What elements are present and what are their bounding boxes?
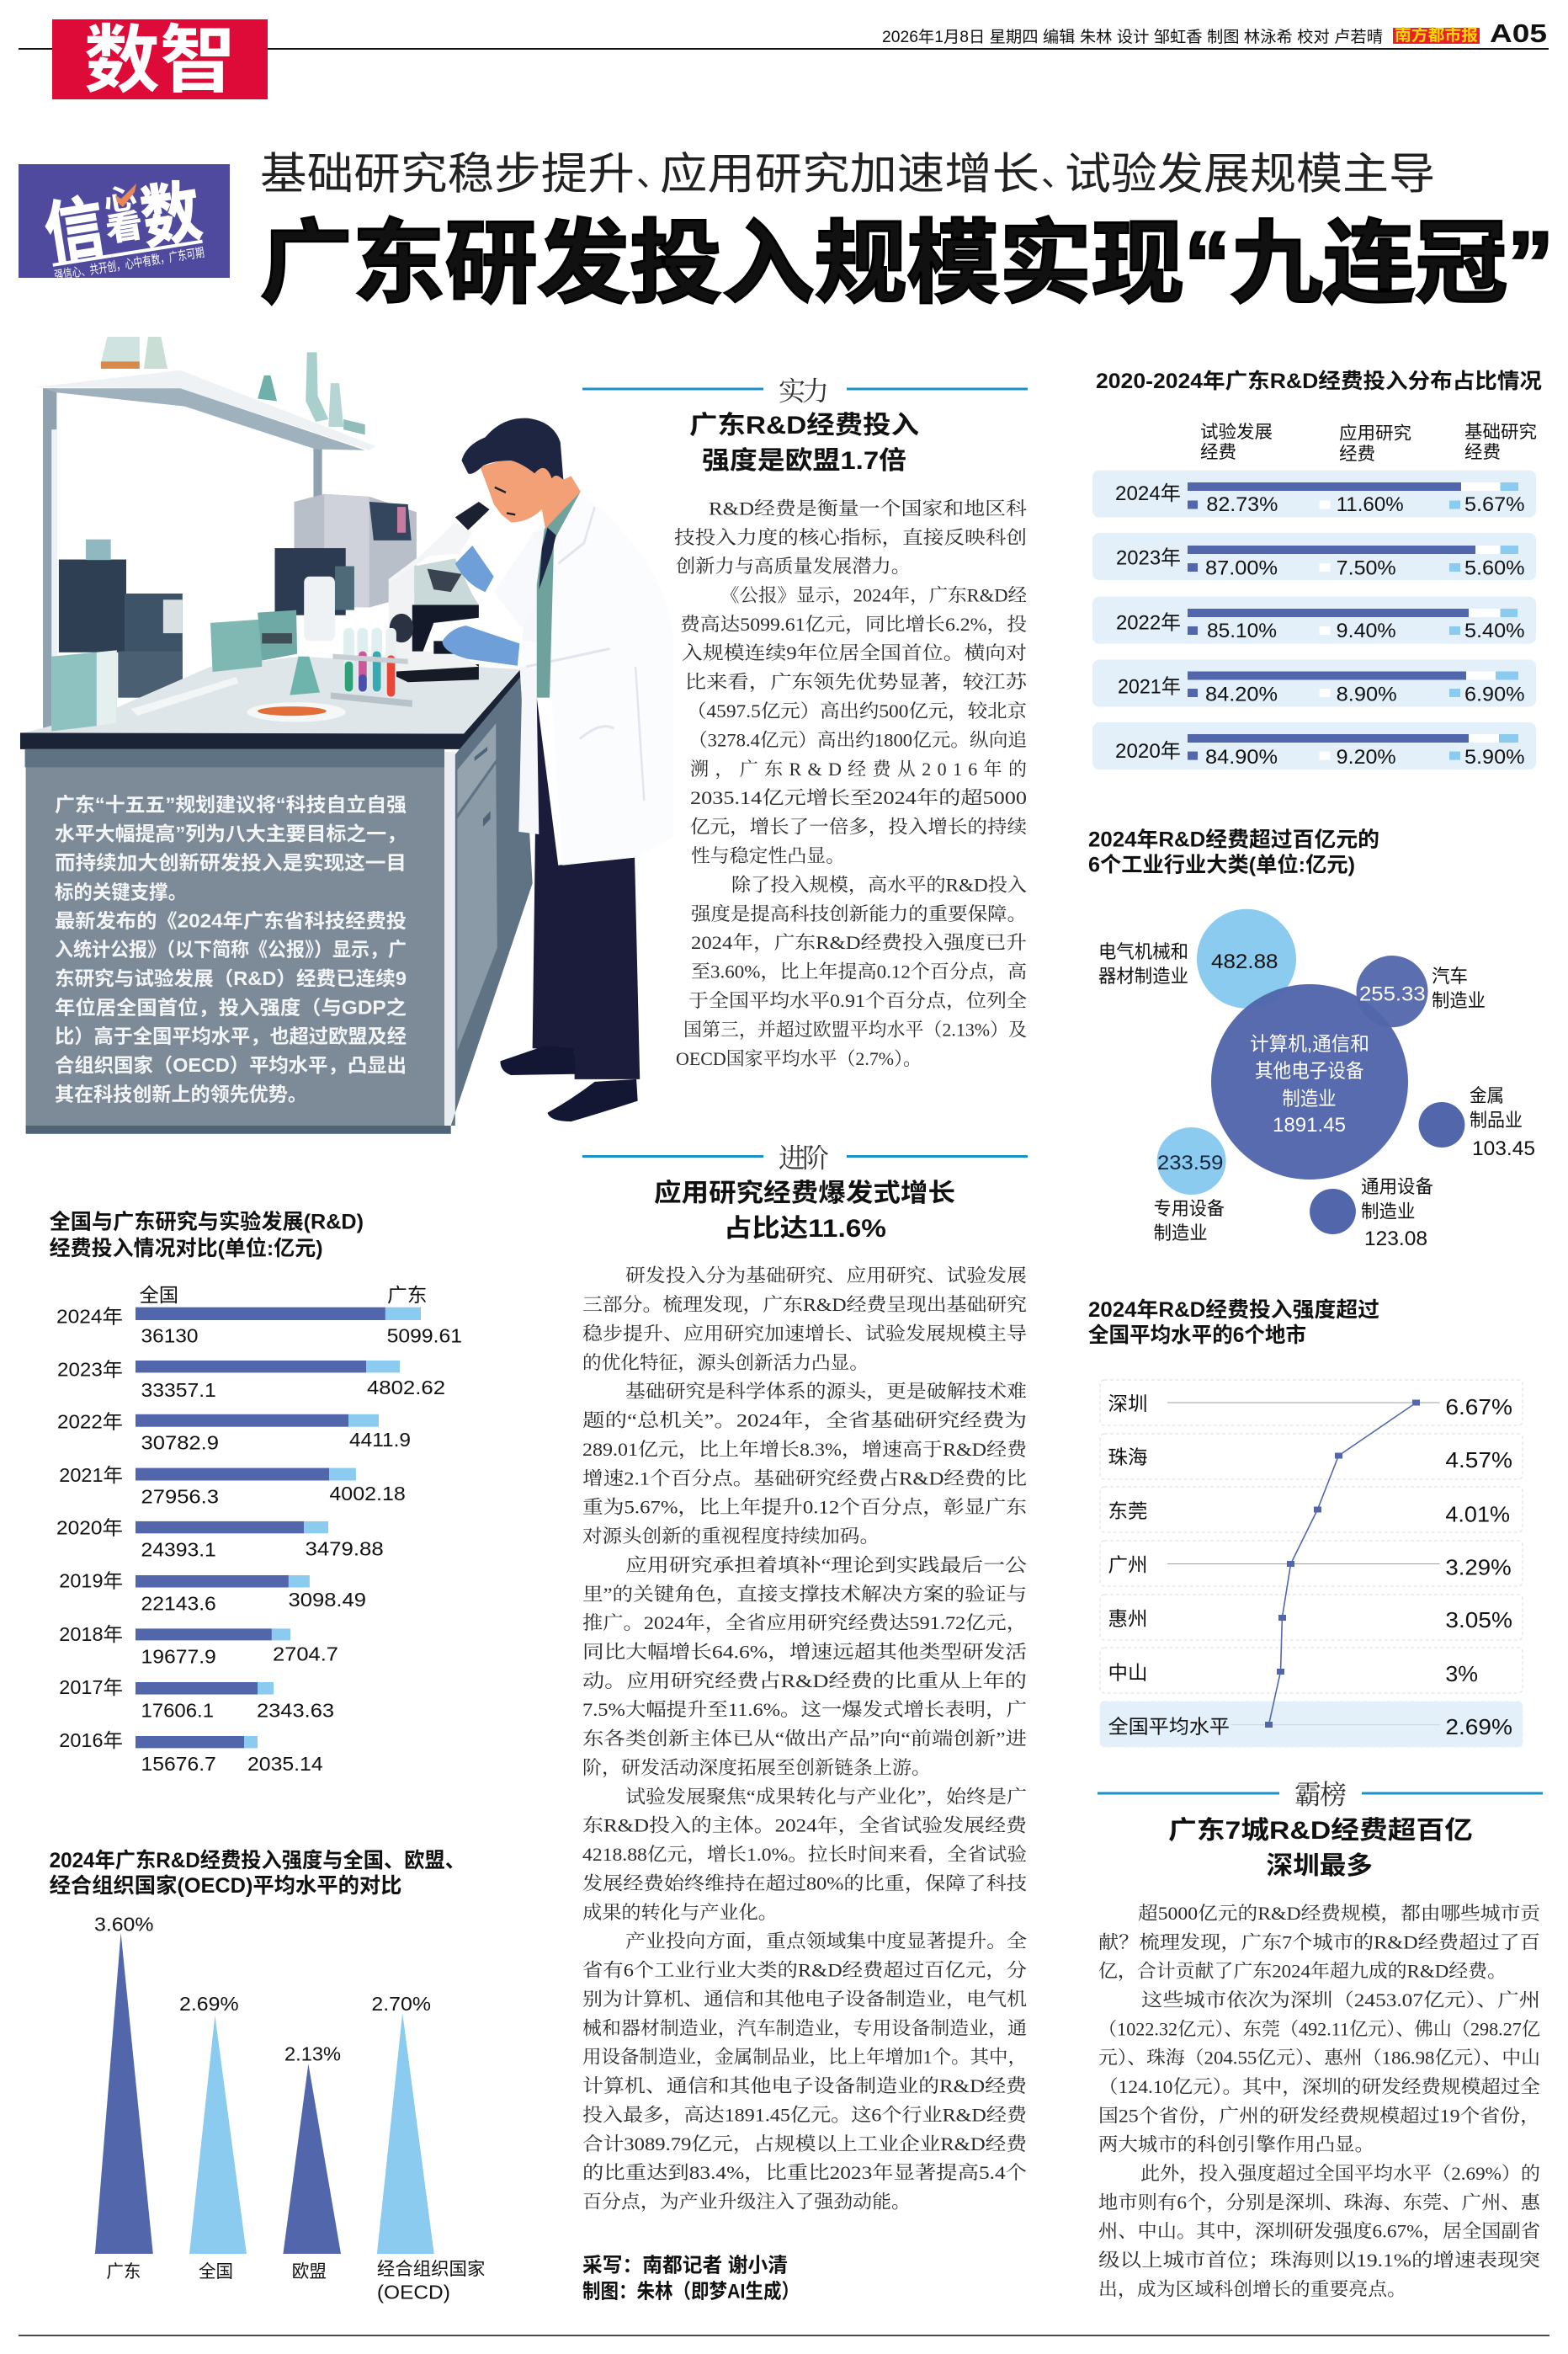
intro text on counter: 比）高于全国平均水平，也超过欧盟及经 <box>55 1025 407 1047</box>
microscope <box>386 664 479 682</box>
body text <box>674 498 1028 1069</box>
year labels: 2017年 <box>59 1676 123 1698</box>
body text: 东R&D投入的主体。2024年，全省试验发展经费 <box>582 1815 1028 1837</box>
heading: 深圳最多 <box>1266 1852 1373 1880</box>
bubble: automobile: 制造业 <box>1432 990 1486 1011</box>
legend labels <box>140 1284 427 1306</box>
section badge <box>52 19 268 102</box>
column headers: 基础研究 <box>1464 423 1537 442</box>
bubble: general equipment: 123.08 <box>1364 1228 1427 1250</box>
body text: 省有6个工业行业大类的R&D经费超过百亿元，分 <box>582 1960 1027 1982</box>
logo: 信心看数: 信 <box>40 189 109 272</box>
counter top <box>20 657 519 734</box>
body text: 阶，研发活动深度拓展至创新链条上游。 <box>582 1757 931 1779</box>
chart title: 全国与广东研究与实验发展(R&D) <box>50 1211 364 1234</box>
credits: 制图：朱林（即梦AI生成） <box>582 2281 800 2303</box>
body text: 投入最多，高达1891.45亿元。这6个行业R&D经费 <box>582 2104 1028 2126</box>
bubble: computers and electronics: 其他电子设备 <box>1255 1059 1364 1081</box>
masthead <box>19 19 1549 102</box>
values: 2.69% <box>1445 1714 1512 1739</box>
body text <box>1098 1903 1542 2300</box>
national values: 17606.1 <box>141 1699 214 1721</box>
column headers: 经费 <box>1200 443 1236 462</box>
city labels: 珠海 <box>1108 1446 1148 1468</box>
triangle: 全国: 全国 <box>199 2262 233 2282</box>
intro text on counter: 东研究与试验发展（R&D）经费已连续9 <box>55 967 407 989</box>
lab machines <box>294 494 417 608</box>
bottom rule <box>19 2335 1549 2336</box>
values: 3.05% <box>1445 1607 1512 1632</box>
legend labels: 全国 <box>140 1284 178 1306</box>
triangle: 广东: 广东 <box>106 2262 141 2282</box>
column headers: 应用研究 <box>1339 424 1411 443</box>
body text: 元）、珠海（204.55亿元）、惠州（186.98亿元）、中山 <box>1098 2048 1540 2069</box>
body text: 入规模连续9年位居全国首位。横向对 <box>682 642 1027 663</box>
body text: 械和器材制造业，汽车制造业，专用设备制造业，通 <box>582 2017 1027 2039</box>
year labels <box>56 1305 123 1751</box>
row 2020 <box>1092 722 1536 770</box>
erlenmeyer <box>290 657 320 695</box>
lab coat <box>533 492 673 865</box>
body text: 计算机、通信和其他电子设备制造业的R&D经费 <box>582 2075 1028 2096</box>
triangle: OECD <box>371 1993 485 2303</box>
body text: 试验发展聚焦“成果转化与产业化”，始终是广 <box>625 1786 1027 1808</box>
values <box>1445 1394 1512 1739</box>
body text: （4597.5亿元）高出约500亿元，较北京 <box>687 700 1027 722</box>
bubble: metal products: 制品业 <box>1470 1110 1523 1131</box>
intro text on counter: 年位居全国首位，投入强度（与GDP之 <box>55 997 407 1019</box>
body text: 里”的关键角色，直接支撑技术解决方案的验证与 <box>582 1584 1027 1606</box>
row 2024: 11.60% <box>1337 493 1404 516</box>
chart title <box>1088 1298 1379 1347</box>
shelf <box>35 370 375 450</box>
intro text on counter: 合组织国家（OECD）平均水平，凸显出 <box>55 1054 407 1076</box>
section tag: 霸榜 <box>1294 1773 1347 1812</box>
national values: 36130 <box>141 1325 199 1347</box>
intro text on counter: 入统计公报》（以下简称《公报》）显示，广 <box>55 938 407 960</box>
row 2023: 87.00% <box>1205 557 1278 580</box>
chart: R&D intensity comparison <box>50 1849 485 2303</box>
Guangdong values: 2035.14 <box>247 1753 323 1775</box>
heading <box>1168 1817 1473 1880</box>
row 2022: 85.10% <box>1207 620 1277 642</box>
national values: 22143.6 <box>141 1593 216 1615</box>
row 2023: 2023年 <box>1116 547 1181 569</box>
row 2024: 5.67% <box>1464 493 1525 516</box>
bubble: special equipment: 专用设备 <box>1154 1198 1225 1219</box>
Guangdong values <box>247 1324 462 1775</box>
values: 4.01% <box>1445 1502 1510 1527</box>
triangle: 欧盟: 2.13% <box>284 2042 341 2064</box>
Guangdong values: 2704.7 <box>273 1643 338 1665</box>
year labels: 2023年 <box>57 1359 123 1381</box>
chart title: 经费投入情况对比(单位:亿元) <box>50 1236 323 1260</box>
value: electrical machinery: 482.88 <box>1211 951 1278 973</box>
body text <box>582 1265 1028 2213</box>
counter front <box>26 749 444 1126</box>
row 2023 <box>1092 533 1536 580</box>
body text: 合计3089.79亿元，占规模以上工业企业R&D经费 <box>582 2133 1028 2155</box>
chart: national vs Guangdong R&D spending <box>50 1211 462 1775</box>
city labels: 中山 <box>1108 1662 1148 1684</box>
body text: 基础研究是科学体系的源头，更是破解技术难 <box>625 1381 1027 1403</box>
bubble: metal products: 金属 <box>1470 1085 1504 1106</box>
year labels: 2024年 <box>56 1305 123 1327</box>
date and editor line: 2026年1月8日 星期四 编辑 朱林 设计 邹虹香 制图 林泳希 校对 卢若晴 <box>882 28 1383 46</box>
Guangdong values: 4802.62 <box>367 1377 445 1398</box>
subtitle: 、 <box>636 157 670 194</box>
body text: 题的“总机关”。2024年，全省基础研究经费为 <box>582 1409 1027 1431</box>
body text: 成果的转化与产业化。 <box>582 1902 778 1923</box>
body text: 东各类创新主体已从“做出产品”向“前端创新”进 <box>582 1728 1027 1750</box>
triangle: OECD: (OECD) <box>377 2282 450 2303</box>
main title: 广东研发投入规模实现“九连冠” <box>260 212 1554 314</box>
line series <box>1265 1399 1420 1728</box>
chart title: 2024年R&D经费超过百亿元的 <box>1088 828 1379 852</box>
body text: 7.5%大幅提升至11.6%。这一爆发式增长表明，广 <box>582 1699 1027 1721</box>
row 2021: 6.90% <box>1464 684 1525 706</box>
bars: Guangdong <box>244 1307 421 1748</box>
column headers: 试验发展 <box>1200 423 1273 442</box>
subtitle: 试验发展规模主导 <box>1065 150 1435 199</box>
section tag: 进阶 <box>779 1137 829 1175</box>
page number: A05 <box>1490 19 1547 48</box>
bubble: general equipment: 制造业 <box>1361 1201 1416 1222</box>
article: 实力 <box>582 370 1028 1069</box>
values: 3.29% <box>1445 1554 1512 1579</box>
body text: 《公报》显示，2024年，广东R&D经 <box>720 584 1027 606</box>
guide lines <box>1167 1403 1440 1725</box>
logo: 信心看数 <box>19 164 230 284</box>
row 2023: 7.50% <box>1337 557 1396 580</box>
counter side <box>451 677 533 1126</box>
chart title: 6个工业行业大类(单位:亿元) <box>1088 852 1355 877</box>
subtitle: 应用研究加速增长 <box>660 150 1039 199</box>
row 2022 <box>1092 597 1536 644</box>
body text: 产业投向方面，重点领域集中度显著提升。全 <box>625 1931 1027 1952</box>
national values: 30782.9 <box>141 1431 219 1453</box>
body text: 国25个省份，广州的研发经费规模超过19个省份， <box>1098 2105 1540 2127</box>
city labels: 东莞 <box>1108 1500 1148 1522</box>
column headers <box>1200 423 1537 464</box>
body text: 地市则有6个，分别是深圳、珠海、东莞、广州、惠 <box>1098 2192 1541 2213</box>
newspaper name: 南方都市报 <box>1395 25 1478 45</box>
Guangdong values: 3479.88 <box>305 1537 384 1559</box>
body text: 对源头创新的重视程度持续加码。 <box>582 1526 880 1547</box>
heading: 广东7城R&D经费超百亿 <box>1168 1817 1473 1845</box>
body text: 2024年，广东R&D经费投入强度已升 <box>691 932 1027 954</box>
section tag <box>582 370 1028 409</box>
logo: 信心看数: 数 <box>136 173 206 257</box>
chart: 2020-2024 R&D share <box>1092 370 1542 770</box>
logo: 信心看数: 心 <box>101 182 139 219</box>
city labels: 深圳 <box>1108 1393 1148 1414</box>
subtitle <box>260 150 1435 199</box>
body text: 比来看，广东领先优势显著，较江苏 <box>685 672 1028 694</box>
column headers: 经费 <box>1339 445 1375 464</box>
body text: 应用研究承担着填补“理论到实践最后一公 <box>625 1554 1027 1575</box>
section badge: 数智 <box>84 19 236 102</box>
bubble: general equipment: 通用设备 <box>1361 1176 1433 1197</box>
national values: 19677.9 <box>141 1645 216 1667</box>
row 2024 <box>1092 471 1536 518</box>
row 2021: 2021年 <box>1118 676 1181 699</box>
section tag <box>1098 1773 1543 1812</box>
national values: 27956.3 <box>141 1485 219 1507</box>
logo: 信心看数: 强信心、共开创，心中有数，广东可期 <box>54 246 205 284</box>
triangle: 欧盟 <box>283 2042 341 2282</box>
row 2022: 2022年 <box>1116 611 1181 634</box>
Guangdong values: 2343.63 <box>257 1699 334 1721</box>
year labels: 2016年 <box>59 1729 123 1751</box>
credits <box>582 2255 800 2303</box>
body text: 溯，广东R&D经费从2016年的 <box>690 759 1027 780</box>
intro text on counter: 最新发布的《2024年广东省科技经费投 <box>55 909 407 931</box>
section tag <box>582 1137 1028 1175</box>
bubble: computers and electronics: 制造业 <box>1282 1088 1337 1110</box>
heading: 强度是欧盟1.7倍 <box>702 447 906 475</box>
body text: 强度是提高科技创新能力的重要保障。 <box>691 903 1027 924</box>
chart title: 经合组织国家(OECD)平均水平的对比 <box>50 1874 401 1898</box>
shelf posts <box>43 388 56 728</box>
bars: national <box>136 1307 385 1748</box>
triangle: 广东: 3.60% <box>94 1913 153 1935</box>
body text: 州、中山。其中，深圳研发强度6.67%，居全国副省 <box>1098 2221 1540 2243</box>
triangle: 广东 <box>94 1913 153 2282</box>
Guangdong values: 5099.61 <box>387 1324 462 1346</box>
triangle: 欧盟: 欧盟 <box>292 2262 327 2282</box>
bubble: special equipment: 233.59 <box>1157 1152 1223 1174</box>
body text: 动。应用研究经费占R&D经费的比重从上年的 <box>582 1670 1027 1691</box>
chart: bubbles for 6 industries <box>1088 828 1535 1250</box>
body text: 稳步提升、应用研究加速增长、试验发展规模主导 <box>582 1323 1027 1344</box>
intro text on counter: 标的关键支撑。 <box>55 881 187 903</box>
national values: 24393.1 <box>141 1539 216 1561</box>
row boxes <box>1100 1380 1523 1747</box>
body text: 用设备制造业，金属制品业，比上年增加1个。其中， <box>582 2047 1027 2069</box>
body text: 研发投入分为基础研究、应用研究、试验发展 <box>625 1265 1027 1286</box>
values: 3% <box>1445 1661 1478 1686</box>
body text: 献？梳理发现，广东7个城市的R&D经费超过了百 <box>1098 1931 1540 1953</box>
year labels: 2022年 <box>57 1411 123 1433</box>
bubble: special equipment: 制造业 <box>1154 1222 1208 1244</box>
body text: 此外，投入强度超过全国平均水平（2.69%）的 <box>1140 2163 1540 2185</box>
body text: 的优化特征，源头创新活力凸显。 <box>582 1352 869 1374</box>
containers <box>51 650 117 731</box>
chart: intensity by city <box>1088 1298 1523 1747</box>
body text: R&D经费是衡量一个国家和地区科 <box>709 498 1027 519</box>
heading: 占比达11.6% <box>724 1215 886 1243</box>
intro text on counter: 水平大幅提高”列为八大主要目标之一， <box>55 823 407 844</box>
chart title: 2024年广东R&D经费投入强度与全国、欧盟、 <box>50 1849 465 1872</box>
triangle: 全国 <box>179 1993 247 2282</box>
body text: 289.01亿元，比上年增长8.3%，增速高于R&D经费 <box>582 1439 1028 1461</box>
body text: （3278.4亿元）高出约1800亿元。纵向追 <box>688 729 1027 750</box>
trousers <box>533 698 640 1079</box>
chart title <box>50 1849 465 1898</box>
row 2021: 84.20% <box>1205 684 1278 706</box>
city labels: 全国平均水平 <box>1108 1716 1230 1738</box>
head <box>480 458 581 529</box>
body text: 技投入力度的核心指标，直接反映科创 <box>674 527 1027 549</box>
gloves <box>455 546 494 592</box>
triangle: OECD: 经合组织国家 <box>377 2260 485 2279</box>
year labels: 2019年 <box>59 1569 123 1591</box>
body text: 级以上城市首位；珠海则以19.1%的增速表现突 <box>1098 2250 1540 2271</box>
body text: 至3.60%，比上年提高0.12个百分点，高 <box>691 961 1027 983</box>
section tag: 实力 <box>779 370 829 409</box>
year labels: 2018年 <box>59 1623 123 1645</box>
row 2020: 9.20% <box>1337 746 1396 769</box>
national values: 33357.1 <box>141 1379 216 1401</box>
body text: 这些城市依次为深圳（2453.07亿元）、广州 <box>1141 1989 1540 2010</box>
body text: 于全国平均水平0.91个百分点，位列全 <box>688 990 1027 1012</box>
body text: 费高达5099.61亿元，同比增长6.2%，投 <box>680 614 1027 636</box>
triangle: OECD: 2.70% <box>371 1993 431 2015</box>
heading <box>689 412 919 475</box>
body text: 4218.88亿元，增长1.0%。拉长时间来看，全省试验 <box>582 1844 1027 1866</box>
row 2020: 2020年 <box>1115 740 1181 763</box>
logo: 信心看数: 看 <box>104 208 146 249</box>
body text: 同比大幅增长64.6%，增速远超其他类型研发活 <box>582 1642 1027 1664</box>
shoes <box>500 1046 576 1075</box>
body text: 亿，合计贡献了广东2024年超九成的R&D经费。 <box>1098 1961 1507 1983</box>
credits: 采写：南都记者 谢小清 <box>582 2255 788 2277</box>
chart title <box>50 1211 364 1260</box>
legend labels: 广东 <box>387 1284 428 1306</box>
shelf flasks <box>101 337 140 363</box>
body text: 百分点，为产业升级注入了强劲动能。 <box>582 2191 911 2213</box>
intro text on counter: 而持续加大创新研发投入是实现这一目 <box>55 852 407 874</box>
Guangdong values: 4411.9 <box>349 1429 411 1451</box>
intro text on counter: 其在科技创新上的领先优势。 <box>55 1083 307 1105</box>
test tubes <box>343 628 354 693</box>
chart title: 2020-2024年广东R&D经费投入分布占比情况 <box>1096 370 1542 393</box>
bubble: electrical machinery: 电气机械和 <box>1098 941 1188 962</box>
body text: 的比重达到83.4%，比重比2023年显著提高5.4个 <box>582 2162 1027 2184</box>
row 2021: 8.90% <box>1337 684 1397 706</box>
bubble: metal products: 103.45 <box>1472 1137 1535 1160</box>
bubble: automobile: 255.33 <box>1359 983 1426 1006</box>
heading: 广东R&D经费投入 <box>689 412 919 439</box>
chart title: 2024年R&D经费投入强度超过 <box>1088 1298 1379 1322</box>
year labels: 2021年 <box>59 1464 123 1486</box>
petri dish <box>247 702 346 722</box>
bubble: automobile: 汽车 <box>1432 966 1468 987</box>
Guangdong values: 4002.18 <box>329 1483 406 1505</box>
body text: 增速2.1个百分点。基础研究经费占R&D经费的比 <box>582 1467 1027 1489</box>
row 2022: 5.40% <box>1464 620 1525 642</box>
chart title: 全国平均水平的6个地市 <box>1088 1323 1306 1347</box>
body text: 两大城市的科创引擎作用凸显。 <box>1098 2134 1374 2155</box>
row 2022: 9.40% <box>1337 620 1396 642</box>
bubble: computers and electronics: 1891.45 <box>1273 1114 1346 1137</box>
subtitle: 基础研究稳步提升 <box>260 150 635 199</box>
bubble: automobile <box>1357 956 1486 1027</box>
bubble: special equipment <box>1154 1127 1226 1244</box>
bubble: general equipment <box>1310 1176 1433 1250</box>
article: 霸榜 <box>1098 1773 1543 2300</box>
heading: 应用研究经费爆发式增长 <box>654 1180 955 1207</box>
city labels: 广州 <box>1108 1554 1148 1576</box>
intro text on counter: 广东“十五五”规划建议将“科技自立自强 <box>55 793 407 815</box>
body text: 创新力与高质量发展潜力。 <box>676 556 911 577</box>
body text: 超5000亿元的R&D经费规模，都由哪些城市贡 <box>1138 1903 1542 1925</box>
bubble: electrical machinery <box>1098 909 1296 1009</box>
row 2021 <box>1092 660 1536 707</box>
subtitle: 、 <box>1041 157 1075 194</box>
row 2020: 5.90% <box>1464 746 1525 769</box>
body text: 推广。2024年，全省应用研究经费达591.72亿元， <box>582 1612 1027 1634</box>
row 2024: 82.73% <box>1206 493 1278 516</box>
row 2024: 2024年 <box>1115 482 1181 505</box>
body text: 别为计算机、通信和其他电子设备制造业，电气机 <box>582 1989 1027 2010</box>
body text: 除了投入规模，高水平的R&D投入 <box>731 874 1027 896</box>
shirt and tie <box>537 492 581 698</box>
values: 6.67% <box>1445 1394 1512 1419</box>
year labels: 2020年 <box>56 1517 123 1539</box>
body text: 三部分。梳理发现，广东R&D经费呈现出基础研究 <box>582 1294 1027 1316</box>
body text: （1022.32亿元）、东莞（492.11亿元）、佛山（298.27亿 <box>1098 2018 1540 2039</box>
body text: （124.10亿元）。其中，深圳的研发经费规模超过全 <box>1098 2076 1540 2098</box>
body text: 重为5.67%，比上年提升0.12个百分点，彰显广东 <box>582 1497 1027 1519</box>
city labels <box>1108 1393 1230 1738</box>
national values: 15676.7 <box>141 1753 216 1775</box>
bubble: computers and electronics: 计算机,通信和 <box>1250 1032 1369 1054</box>
chart title <box>1088 828 1379 877</box>
bubble: computers and electronics <box>1211 984 1408 1180</box>
values: 4.57% <box>1445 1447 1512 1473</box>
national values <box>141 1325 219 1775</box>
Guangdong values: 3098.49 <box>288 1589 366 1611</box>
bubble: electrical machinery: 器材制造业 <box>1098 966 1188 987</box>
row 2020: 84.90% <box>1205 746 1278 769</box>
intro text on counter <box>55 793 407 1105</box>
heading <box>654 1180 955 1243</box>
body text: 发展经费始终维持在超过80%的比重，保障了科技 <box>582 1872 1027 1894</box>
body text: 出，成为区域科创增长的重要亮点。 <box>1098 2278 1406 2300</box>
body text: OECD国家平均水平（2.7%）。 <box>676 1048 922 1069</box>
bubble: metal products <box>1419 1085 1535 1160</box>
row 2023: 5.60% <box>1464 557 1525 580</box>
body text: 2035.14亿元增长至2024年的超5000 <box>690 787 1027 808</box>
body text: 亿元，增长了一倍多，投入增长的持续 <box>690 817 1027 839</box>
city labels: 惠州 <box>1108 1608 1148 1630</box>
illustration: laboratory scientist <box>20 337 673 1134</box>
article: 进阶 <box>582 1137 1028 2303</box>
column headers: 经费 <box>1464 443 1501 462</box>
body text: 国第三，并超过欧盟平均水平（2.13%）及 <box>683 1019 1027 1041</box>
body text: 性与稳定性凸显。 <box>691 845 845 866</box>
triangle: 全国: 2.69% <box>179 1993 239 2015</box>
